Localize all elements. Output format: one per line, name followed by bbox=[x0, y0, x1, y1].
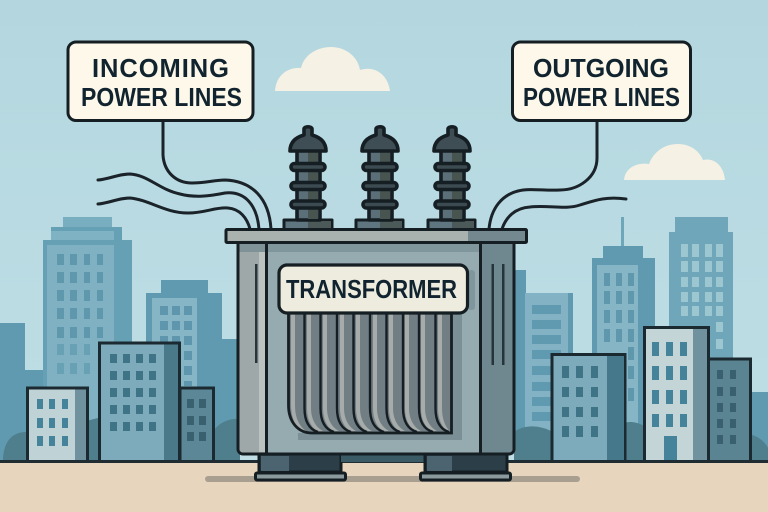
radiator fins bbox=[288, 310, 452, 433]
callout: outgoing power lines: OUTGOING bbox=[533, 55, 669, 83]
ground bbox=[0, 460, 768, 512]
insulator bushing 1 bbox=[284, 127, 332, 230]
front building E bbox=[644, 328, 708, 462]
callout: incoming power lines: POWER LINES bbox=[81, 84, 242, 112]
incoming power wires bbox=[98, 121, 271, 229]
callout: incoming power lines bbox=[68, 42, 253, 120]
top plate bbox=[226, 230, 526, 242]
background skyline left bbox=[0, 217, 240, 461]
transformer feet bbox=[256, 452, 510, 480]
outgoing power wires bbox=[489, 121, 626, 229]
insulator bushing 3 bbox=[428, 127, 475, 230]
transformer label: TRANSFORMER bbox=[286, 274, 457, 304]
panel shadow bbox=[298, 313, 462, 440]
transformer body bbox=[238, 238, 514, 454]
right side panel bbox=[479, 243, 512, 453]
front building D bbox=[552, 354, 625, 462]
front building C bbox=[180, 388, 214, 462]
cloud left bbox=[275, 47, 390, 91]
background skyline right bbox=[514, 217, 768, 461]
transformer label bbox=[279, 265, 468, 313]
front building F bbox=[708, 359, 750, 462]
callout: outgoing power lines bbox=[512, 42, 690, 120]
front building B bbox=[100, 343, 180, 462]
callout: outgoing power lines: POWER LINES bbox=[523, 84, 680, 112]
insulator bushing 2 bbox=[356, 127, 403, 230]
callout: incoming power lines: INCOMING bbox=[92, 55, 229, 83]
left side panel bbox=[240, 243, 268, 453]
front building A bbox=[28, 388, 88, 462]
cloud right bbox=[624, 144, 725, 180]
bushes bbox=[3, 418, 768, 461]
